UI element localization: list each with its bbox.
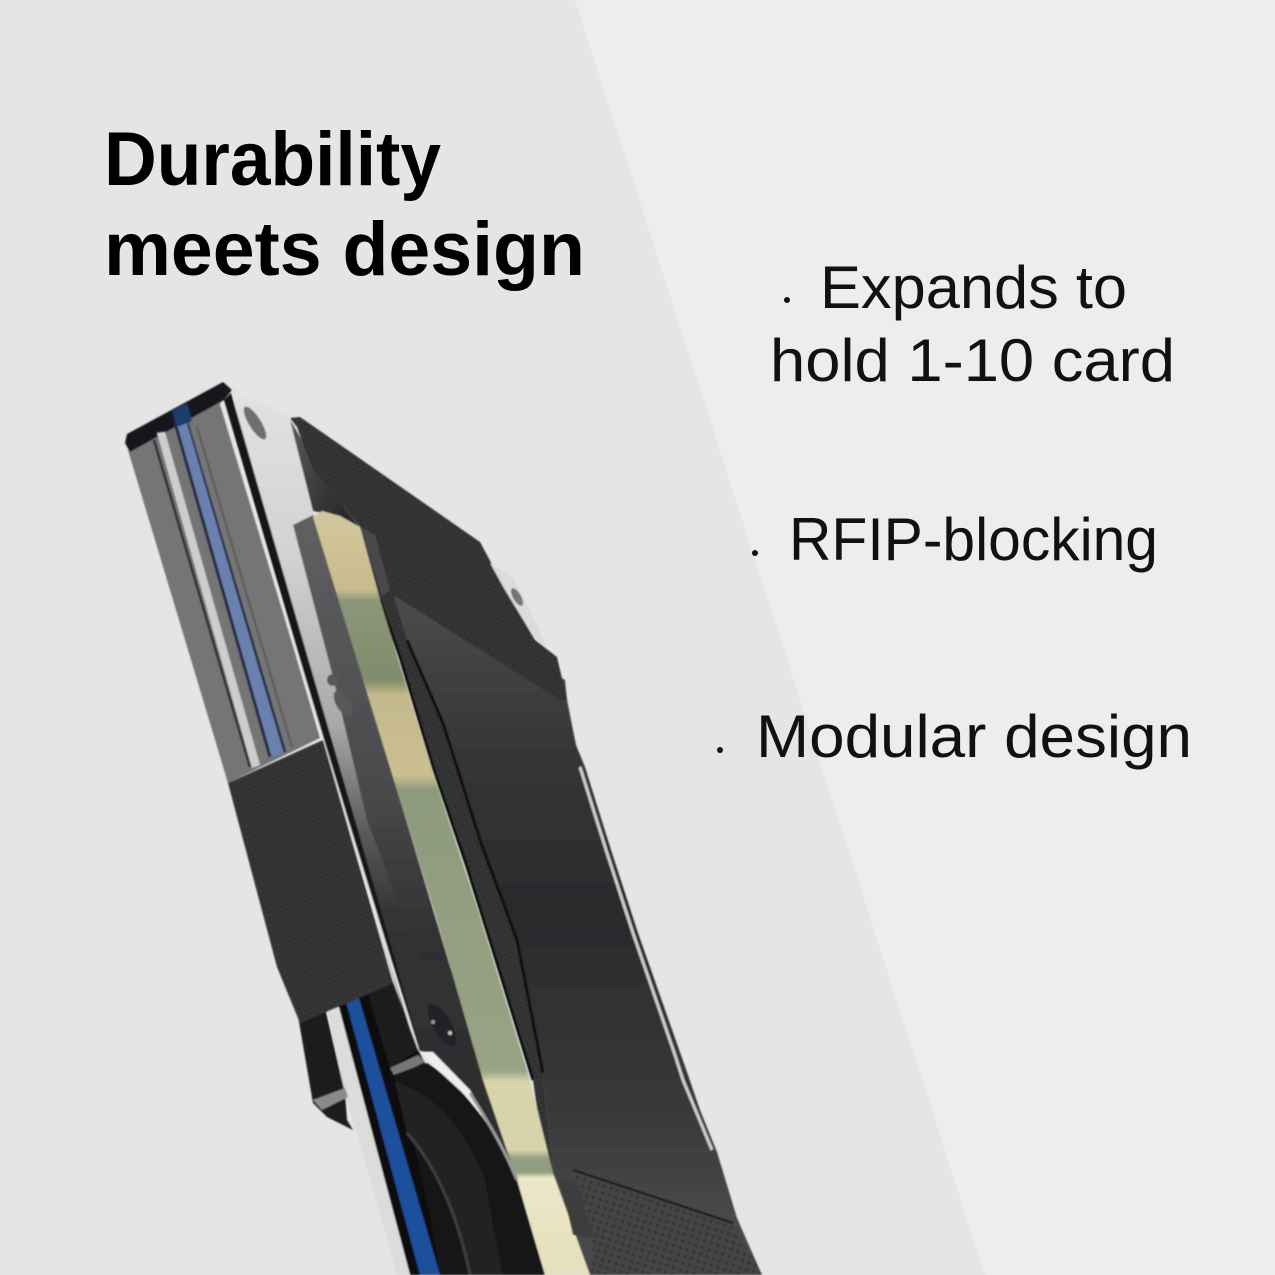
wallet: dark wedge under flap [290,420,362,530]
title [104,117,585,292]
wallet: right silver corner [490,563,547,648]
wallet: right lower block [367,980,418,1068]
wallet: lower black base [338,980,537,1275]
feature list [717,254,1192,770]
wallet: left block highlight [313,1088,348,1110]
bullet: expands: Expands to [820,254,1127,321]
wallet illustration [125,382,762,1275]
wallet: curved ring [393,1063,545,1275]
wallet: white seam line [221,403,418,1050]
wallet: top elastic flap [290,417,567,700]
title: Durability [104,117,441,202]
wallet: left lower block [298,1008,353,1130]
wallet: dark lines [154,422,292,767]
wallet: white stripe [157,432,260,768]
wallet: lower screw [422,1000,462,1050]
background: diagonal band [0,0,985,1275]
wallet: middle elastic band [228,740,393,1023]
wallet: end cap [125,382,232,452]
wallet: lower band edge line [573,1170,733,1223]
wallet: top screw [240,404,270,442]
wallet: front silver plate [232,389,517,1180]
bullet: expands [770,254,1175,394]
wallet: rear black panel [380,570,762,1275]
wallet: black seam [224,393,420,1050]
wallet: lower flap corner [560,1180,593,1238]
wallet: side grey body [128,400,320,783]
wallet: bank note [313,511,590,1275]
wallet: blue stripe [177,420,283,757]
wallet: middle screw [327,674,356,719]
wallet: silver edge line [580,767,712,1150]
bullet: expands: hold 1-10 card [770,327,1175,394]
wallet: ring middle band [395,1082,503,1275]
wallet: lower white stripe [327,1004,410,1275]
title: meets design [104,207,585,292]
wallet: lower elastic band [573,1170,762,1275]
wallet: silver curve highlight [422,1052,517,1180]
wallet: ring inner arc [407,1133,470,1275]
wallet: inner plate strip [293,515,448,960]
wallet: blue cap [172,403,192,427]
bullet: modular: Modular design [756,703,1192,770]
wallet: right block highlight [390,1055,425,1077]
wallet: gusset lines [380,600,543,1080]
wallet: right screw [509,586,525,608]
bullet: RFIP: RFIP-blocking [789,506,1158,573]
wallet: lower blue stripe [345,995,440,1275]
wallet: flap inner fold [360,527,390,596]
wallet: gusset beside note [360,527,590,1275]
